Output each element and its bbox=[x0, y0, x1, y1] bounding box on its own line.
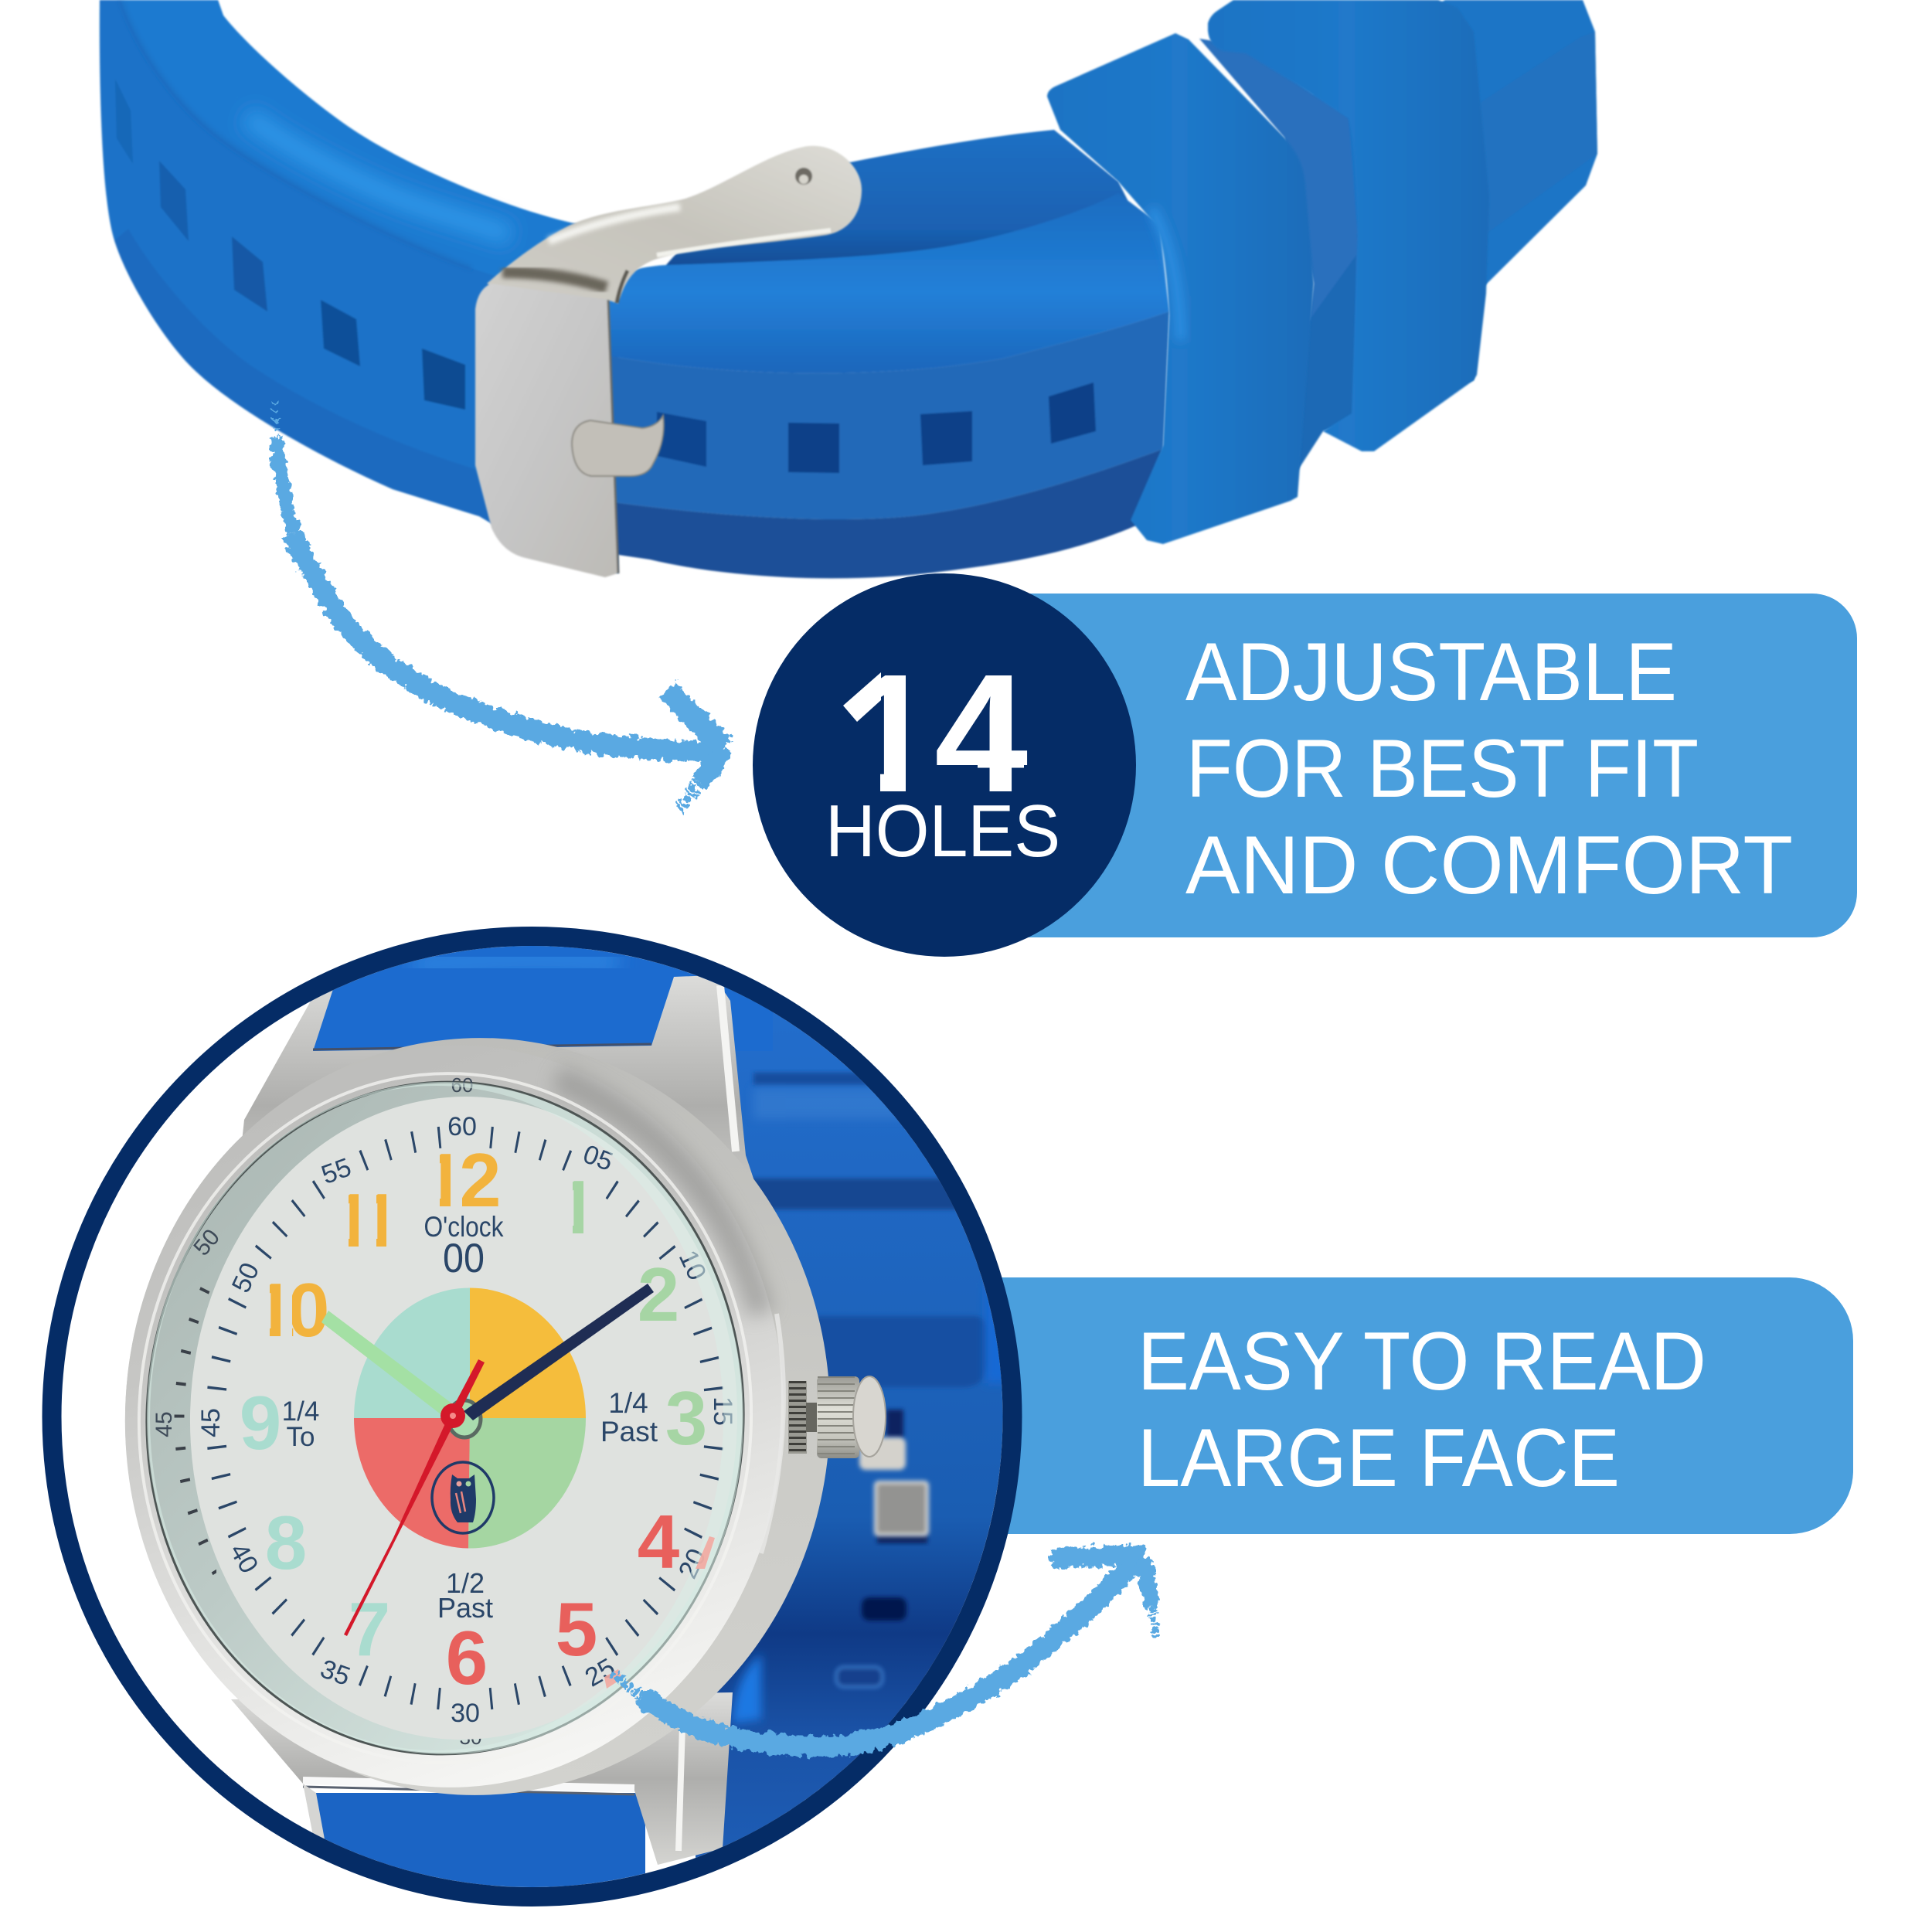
hour numerals: 1 bbox=[556, 1165, 598, 1250]
strap keeper loop one bbox=[1047, 33, 1314, 544]
minute numbers: 30 bbox=[451, 1699, 480, 1728]
crystal edge bbox=[132, 1070, 758, 1767]
bottom strap bbox=[316, 1793, 645, 1887]
dial fraction labels: Past bbox=[437, 1592, 493, 1624]
second hand bbox=[344, 1359, 485, 1636]
icon: owl logo bbox=[432, 1462, 494, 1533]
navy ring bbox=[52, 937, 1012, 1896]
minute numbers: 45 bbox=[196, 1408, 226, 1437]
minute numbers: 25 bbox=[580, 1653, 620, 1692]
reflected numbers bbox=[151, 1073, 481, 1749]
reflected numbers: 50 bbox=[189, 1225, 225, 1260]
minute numbers: 50 bbox=[226, 1258, 265, 1298]
arrow: from watch face to easy to read banner bbox=[612, 1555, 1156, 1747]
text: adjustable for best fit and comfort: FOR BEST FIT bbox=[1186, 722, 1699, 815]
minute numbers bbox=[196, 1112, 737, 1728]
minute numbers: 05 bbox=[579, 1139, 617, 1177]
reflected numbers: 45 bbox=[151, 1411, 177, 1437]
strap keeper loop two bbox=[1208, 0, 1489, 451]
dial fraction labels: O'clock bbox=[423, 1211, 504, 1243]
blurred strap to the right of case bbox=[696, 975, 1003, 1858]
crystal right edge highlight bbox=[147, 1082, 743, 1754]
hour hand bbox=[321, 1311, 456, 1419]
dial fraction labels: 1/4 bbox=[608, 1387, 648, 1419]
photo circle: watch close-up bbox=[52, 927, 1036, 1917]
top lug silver bbox=[243, 975, 754, 1179]
minute numbers: 40 bbox=[224, 1539, 264, 1578]
centre hub bbox=[440, 1403, 465, 1428]
pie quadrants bbox=[354, 1287, 586, 1549]
dial fraction labels: 1/4 bbox=[282, 1396, 319, 1427]
hour numerals: 10 bbox=[253, 1267, 330, 1352]
case side bbox=[106, 1020, 849, 1813]
number 14: 14 bbox=[845, 640, 1028, 828]
minute ticks bbox=[216, 1136, 715, 1700]
bottom lug silver bbox=[231, 1692, 733, 1865]
hour numerals: 2 bbox=[638, 1252, 679, 1337]
right strap section with holes bbox=[603, 130, 1169, 578]
panel: easy to read banner bbox=[943, 1277, 1853, 1534]
hour numerals: 5 bbox=[556, 1587, 597, 1672]
hour numerals: 6 bbox=[446, 1615, 488, 1700]
text: adjustable for best fit and comfort: AND COMFORT bbox=[1185, 818, 1793, 911]
minute numbers: 35 bbox=[316, 1654, 354, 1692]
minute hand bbox=[464, 1284, 654, 1420]
buckle pin bbox=[572, 416, 664, 476]
crown bbox=[788, 1376, 886, 1458]
minute numbers: 60 bbox=[447, 1112, 477, 1141]
left strap section with holes bbox=[100, 0, 618, 573]
watch dial bbox=[182, 1090, 746, 1747]
label holes: HOLES bbox=[825, 790, 1060, 872]
hour numerals: 4 bbox=[638, 1499, 679, 1584]
top strap bbox=[313, 946, 773, 1051]
text: adjustable for best fit and comfort bbox=[1185, 625, 1793, 911]
text: easy to read large face: LARGE FACE bbox=[1138, 1411, 1620, 1504]
text: easy to read large face: EASY TO READ bbox=[1138, 1315, 1706, 1407]
dial fraction labels: 00 bbox=[443, 1236, 485, 1281]
badge: 14 holes circle bbox=[753, 573, 1136, 957]
dial fraction labels: 1/2 bbox=[446, 1567, 485, 1599]
dial fraction labels: Past bbox=[600, 1416, 658, 1447]
number 14 bbox=[843, 672, 1028, 791]
hour numerals: 7 bbox=[349, 1587, 390, 1672]
text: adjustable for best fit and comfort: ADJUSTABLE bbox=[1185, 625, 1677, 718]
metal buckle bbox=[475, 146, 862, 577]
hand shadow and hub ring bbox=[448, 1400, 481, 1437]
dial fraction labels bbox=[282, 1211, 658, 1624]
buckle flat plate bbox=[475, 284, 617, 577]
photo: blue silicone strap with buckle and keepers bbox=[100, 0, 1597, 578]
pink reflections bbox=[604, 1536, 715, 1689]
arrow: from strap to 14 holes badge bbox=[275, 402, 725, 811]
hour numerals bbox=[240, 1138, 707, 1700]
hour numerals: 12 bbox=[423, 1138, 502, 1223]
minute numbers: 10 bbox=[673, 1246, 712, 1285]
hour numerals: 3 bbox=[665, 1376, 707, 1461]
minute numbers: 55 bbox=[318, 1152, 355, 1190]
panel: adjustable strap banner bbox=[966, 594, 1857, 937]
hour numerals: 8 bbox=[265, 1500, 307, 1585]
buckle upper tongue bbox=[487, 146, 862, 304]
dial fraction labels: To bbox=[287, 1422, 315, 1452]
reflected ticks in the crystal bbox=[175, 1287, 216, 1575]
text: easy to read large face bbox=[1138, 1315, 1706, 1504]
back strap end behind keepers bbox=[1199, 0, 1597, 479]
minute numbers: 20 bbox=[673, 1544, 712, 1583]
reflected numbers: 60 bbox=[451, 1073, 473, 1097]
minute numbers: 15 bbox=[708, 1396, 737, 1426]
reflected numbers: 30 bbox=[460, 1726, 481, 1749]
hour numerals: 9 bbox=[240, 1380, 281, 1465]
hour numerals: 11 bbox=[332, 1178, 402, 1263]
bezel bbox=[125, 1104, 781, 1787]
